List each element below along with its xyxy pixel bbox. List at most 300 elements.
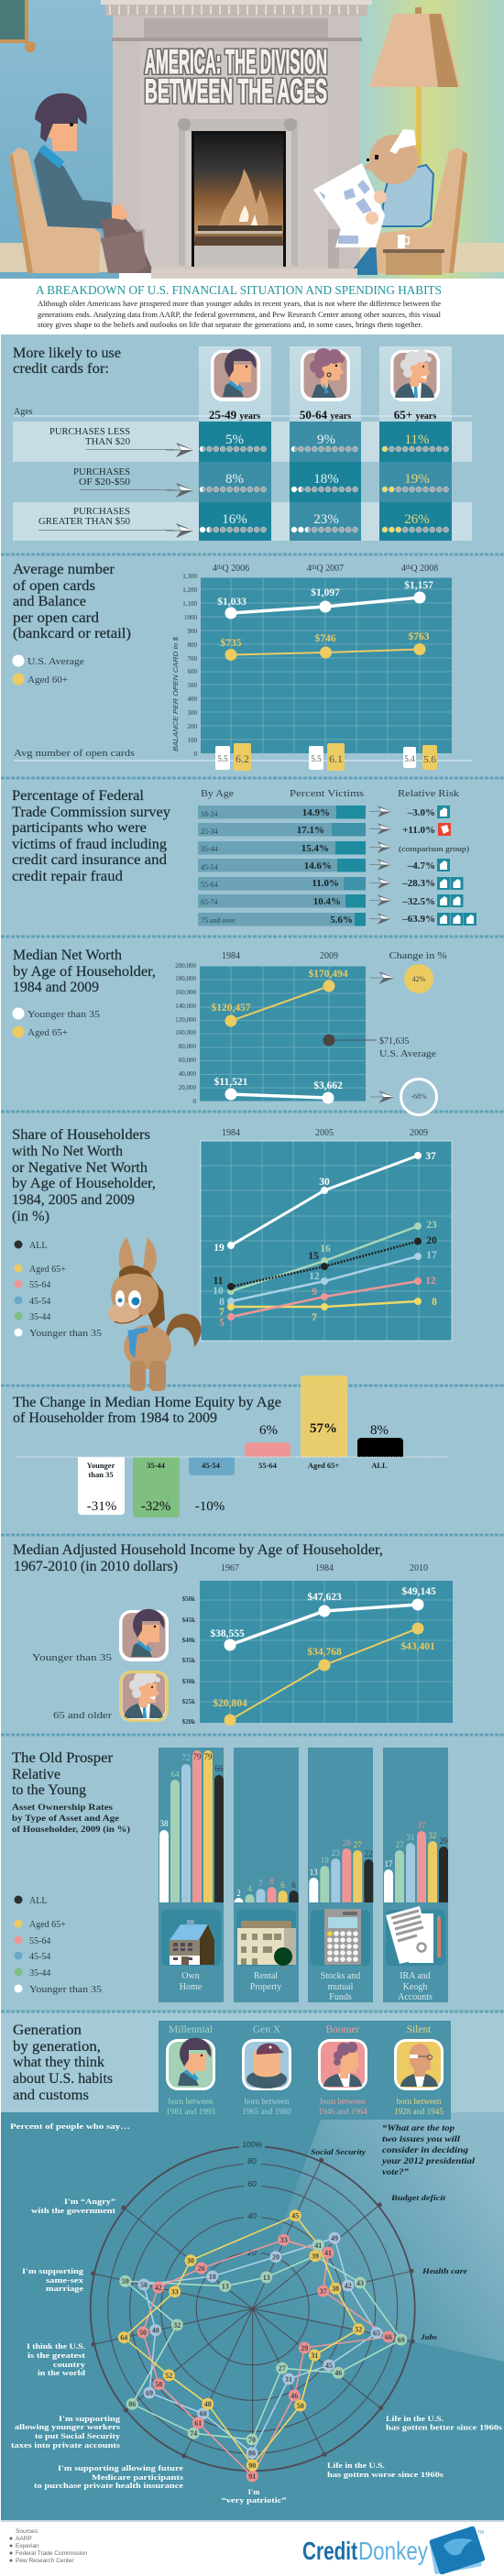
line chart: Q 2007 (316, 564, 344, 574)
node values: 37 (320, 2287, 327, 2296)
line chart: 80,000 (179, 1043, 196, 1050)
line chart: 0 (192, 1098, 196, 1105)
asset labels: Keogh (403, 1982, 427, 1992)
radar issue labels: Health care (422, 2266, 467, 2275)
bars: own home: 64 (170, 1770, 180, 1779)
avatars (211, 348, 440, 401)
heading: Percentage of Federal (12, 788, 145, 804)
line chart: 40,000 (179, 1070, 196, 1078)
line chart: 200,000 (175, 962, 196, 970)
age labels: 25-49 years (209, 408, 260, 422)
legend (13, 654, 85, 685)
birth years: 1946 and 1964 (318, 2107, 367, 2116)
heading: The Change in Median Home Equity by Age (13, 1395, 281, 1410)
fireplace surround and fire (178, 118, 298, 267)
line chart: 120,000 (175, 1016, 196, 1024)
line chart: $34,768 (307, 1646, 342, 1658)
heading: per open card (13, 610, 99, 626)
dot scales (200, 446, 449, 532)
birth years: born between (245, 2097, 290, 2106)
generation columns: Silent (407, 2024, 432, 2035)
bars: IRA and Keogh: 31 (407, 1833, 414, 1842)
bars: IRA and Keogh: 27 (396, 1840, 404, 1849)
radar issue labels: Budget deficit (390, 2193, 446, 2202)
radar chart (91, 2139, 415, 2482)
bars: rental property: 6 (280, 1880, 285, 1890)
percentages: 23% (313, 512, 339, 527)
title (145, 43, 327, 110)
node values: 50 (139, 2329, 147, 2337)
age labels: 18-24 (201, 810, 218, 818)
birth years: born between (169, 2097, 214, 2106)
open card counts: 5.4 (404, 754, 415, 763)
percentages: 19% (404, 472, 430, 487)
legend (13, 1008, 100, 1038)
age labels: 55-64 (201, 881, 218, 889)
node values: 42 (345, 2282, 352, 2290)
age labels: 50-64 years (300, 408, 351, 422)
open card counts: 5.5 (311, 754, 322, 763)
node values: 45 (291, 2212, 299, 2220)
line chart: 15 (308, 1251, 319, 1262)
node values: 49 (331, 2234, 338, 2242)
bars: rental property: 6 (291, 1880, 296, 1890)
heading: (bankcard or retail) (13, 626, 131, 641)
node values: 20 (272, 2253, 279, 2262)
heading: and customs (13, 2088, 89, 2103)
node values: 59 (122, 2277, 129, 2286)
generation columns: Gen X (253, 2024, 281, 2035)
generation columns (169, 2024, 432, 2035)
heading: 1984 and 2009 (13, 980, 99, 995)
asset labels: Accounts (398, 1992, 433, 2002)
radar statement labels: same-sex (46, 2275, 84, 2285)
panel: fraud victims: (comparison group) (399, 845, 469, 853)
line chart: $50k (182, 1595, 195, 1603)
bars: own home: 38 (159, 1819, 169, 1828)
avatars with labels: 65 and older (53, 1711, 113, 1721)
node values: 52 (355, 2326, 362, 2333)
row labels: PURCHASES (73, 466, 130, 477)
line chart: 17 (426, 1250, 437, 1261)
line chart: 180,000 (175, 975, 196, 982)
bars: stocks and funds: 27 (354, 1840, 362, 1849)
heading: (in %) (12, 1209, 49, 1224)
heading: of open cards (13, 578, 95, 594)
node values: 39 (312, 2253, 319, 2260)
line chart: $25k (182, 1698, 195, 1705)
legend: 35-44 (29, 1968, 50, 1979)
line chart: $43,401 (400, 1640, 435, 1652)
line chart: Change in % (389, 951, 447, 961)
line chart: th (217, 564, 223, 571)
line chart: 12 (425, 1276, 436, 1287)
node values: 31 (311, 2351, 318, 2360)
heading: to the Young (12, 1782, 86, 1798)
bars: rental property: 7 (258, 1879, 263, 1888)
open card counts: 6.2 (236, 752, 249, 765)
rings and spokes (91, 2146, 415, 2471)
bar labels: 35-44 (147, 1461, 166, 1470)
percentages (222, 433, 430, 527)
logo: CreditDonkey: Donkey (358, 2537, 428, 2565)
percentages: 9% (317, 433, 335, 447)
heading: about U.S. habits (13, 2071, 113, 2087)
line chart: $763 (409, 630, 430, 642)
line chart (201, 1128, 452, 1341)
age labels: 65+ years (394, 408, 436, 422)
legend (15, 1895, 102, 1995)
line chart: 700 (187, 655, 198, 663)
positive bars (245, 1376, 403, 1457)
line chart: 300 (187, 709, 198, 717)
U.S. average marker (323, 1034, 437, 1059)
young man in armchair (9, 93, 154, 273)
relative risk: –63.9% (401, 914, 435, 925)
line chart: 800 (187, 641, 198, 649)
sources (9, 2528, 87, 2564)
node values: 13 (263, 2274, 270, 2282)
scale labels: 100% (242, 2140, 262, 2149)
heading (12, 1750, 114, 1798)
radar question: “What are the top (382, 2123, 455, 2133)
avatar: boomer (318, 2039, 367, 2090)
line chart: 2009 (410, 1128, 428, 1138)
bars: stocks and funds: 22 (365, 1849, 373, 1858)
line chart: th (406, 564, 411, 571)
bar labels: 45-54 (202, 1461, 221, 1470)
radar statement labels: “very patriotic” (222, 2495, 286, 2505)
node values: 52 (165, 2372, 172, 2380)
percentages: 8% (225, 472, 244, 487)
asset labels: Funds (329, 1992, 352, 2002)
birth years: 1928 and 1945 (394, 2107, 444, 2116)
open card counts: 6.1 (329, 752, 343, 765)
node values: 46 (290, 2392, 298, 2400)
node values: 70 (248, 2436, 256, 2444)
arrows (38, 449, 174, 530)
avatar: gen x (242, 2039, 291, 2090)
legend: Younger than 35 (27, 1010, 100, 1020)
node values: 33 (171, 2287, 179, 2296)
radar statement labels (11, 2197, 503, 2505)
subheading: Asset Ownership Rates (12, 1803, 113, 1813)
panel: average open cards and balance (13, 562, 472, 771)
icon: house (170, 1920, 214, 1965)
node values: 69 (398, 2336, 405, 2344)
node values: 65 (373, 2329, 380, 2337)
percentages: 16% (222, 512, 247, 527)
line chart (171, 564, 452, 758)
node values: 58 (155, 2381, 162, 2388)
line chart: 20 (426, 1235, 437, 1246)
icon: donkey mascot (108, 1237, 202, 1391)
birth years: 1965 and 1980 (242, 2107, 291, 2116)
scale labels: 20 (247, 2248, 257, 2257)
node values: 42 (155, 2284, 162, 2292)
U.S. average marker: U.S. Average (379, 1049, 437, 1059)
line chart: $120,457 (211, 1002, 251, 1014)
legend: Aged 60+ (27, 675, 68, 685)
heading: Average number (13, 562, 115, 577)
generation columns: Millennial (169, 2024, 213, 2035)
bars: own home: 79 (192, 1752, 202, 1761)
heading: Median Adjusted Household Income by Age of Householder, (13, 1542, 383, 1558)
bar labels: Aged 65+ (308, 1461, 339, 1470)
node values: 13 (222, 2282, 229, 2291)
line chart: 16 (320, 1244, 331, 1255)
bars: rental property: 8 (269, 1877, 274, 1886)
heading: participants who were (12, 820, 147, 836)
heading: victims of fraud including (12, 837, 167, 852)
radar question: consider in deciding (382, 2146, 468, 2155)
bar values: -32% (141, 1499, 170, 1514)
legend: U.S. Average (27, 657, 85, 667)
sources: Sources: (16, 2528, 39, 2535)
heading: Generation (13, 2022, 82, 2038)
heading (12, 1127, 156, 1224)
line chart: Q 2006 (222, 564, 249, 574)
age labels: 35-44 (201, 845, 218, 853)
table header: By Age (201, 789, 235, 799)
bars: IRA and Keogh: 17 (385, 1859, 393, 1869)
line chart: $1,157 (404, 579, 433, 591)
radar statement labels: to put Social Security (35, 2431, 121, 2440)
node values: 66 (385, 2333, 392, 2341)
node values: 48 (152, 2326, 159, 2335)
age labels: 45-54 (201, 863, 218, 871)
icon: calculator (324, 1909, 361, 1965)
heading: credit cards for: (13, 361, 109, 377)
bar values (87, 1421, 389, 1514)
line chart: 200 (187, 723, 198, 730)
line chart: $1,033 (217, 596, 247, 608)
radar label: percent of people: Percent of people who say… (10, 2121, 130, 2131)
section dividers (1, 554, 504, 2011)
bars: stocks and funds (309, 1838, 373, 1902)
data cells (199, 422, 452, 541)
node values: 41 (314, 2242, 322, 2250)
legend: 55-64 (29, 1936, 50, 1946)
panel: household income (13, 1542, 453, 1726)
line chart: BALANCE PER OPEN CARD in $ (171, 636, 180, 751)
bars: IRA and Keogh: 37 (418, 1821, 426, 1830)
age labels: 25-34 (201, 828, 218, 836)
bar labels (87, 1461, 388, 1479)
bars (198, 806, 366, 926)
radar question: vote?” (382, 2168, 409, 2177)
logo: CreditDonkey (302, 2526, 486, 2575)
icon: apartment building (237, 1921, 296, 1969)
line chart: $47,623 (307, 1591, 342, 1603)
row labels: PURCHASES LESS (49, 426, 130, 437)
line chart: 140,000 (175, 1003, 196, 1010)
table header (201, 789, 459, 799)
node values: 69 (146, 2389, 153, 2397)
bars: own home: 72 (181, 1753, 191, 1762)
heading: Trade Commission survey (12, 805, 170, 820)
node values: 41 (324, 2249, 332, 2257)
change badges (370, 964, 436, 1114)
heading: credit repair fraud (12, 869, 123, 884)
row labels: GREATER THAN $50 (38, 516, 130, 527)
line chart: 20,000 (179, 1084, 196, 1091)
asset labels: Property (250, 1982, 281, 1992)
node values: 38 (332, 2285, 339, 2293)
line chart: 4 (213, 564, 217, 574)
line chart: 7 (312, 1312, 317, 1323)
heading (13, 1542, 383, 1574)
row labels: THAN $20 (85, 436, 130, 447)
panel: average open cards and balance: Avg number of open cards (14, 749, 135, 759)
intro paragraph: generations ends. Analyzing data from AARP, the federal government, and Pew Research Center among other sources, this visual (38, 310, 442, 319)
age labels (209, 408, 436, 422)
line chart: 10 (213, 1286, 224, 1297)
avatar: millennial (166, 2038, 215, 2090)
node values: 86 (248, 2449, 256, 2458)
bar labels: Younger (87, 1461, 115, 1470)
legend: 55-64 (29, 1280, 50, 1290)
radar statement labels: I'm supporting (59, 2414, 121, 2423)
logo: CreditDonkey: TM (477, 2530, 484, 2536)
radar statement labels: I think the U.S. (27, 2341, 85, 2351)
node values: 91 (248, 2472, 256, 2481)
heading (13, 345, 121, 377)
legend: Aged 65+ (29, 1920, 66, 1930)
radar issue labels: Social Security (311, 2147, 366, 2156)
node values: 33 (280, 2236, 288, 2244)
radar question (381, 2123, 475, 2177)
radar issue labels: Jobs (420, 2332, 438, 2341)
avatars with labels: Younger than 35 (32, 1653, 112, 1663)
line chart: 4 (307, 564, 312, 574)
bars: own home: 79 (203, 1752, 213, 1761)
values (297, 807, 353, 926)
line chart: $735 (220, 637, 242, 649)
panel: credit card usage: Ages (14, 407, 33, 417)
bar values: 6% (259, 1423, 278, 1438)
bars: IRA and Keogh: 32 (429, 1831, 436, 1840)
radar statement labels: I'm (248, 2487, 259, 2496)
line chart: 30 (319, 1177, 330, 1188)
panel columns (159, 1748, 448, 2002)
line chart: $20k (182, 1718, 195, 1726)
line chart: $3,662 (313, 1080, 343, 1091)
legend (15, 1241, 102, 1339)
relative risk: –4.7% (407, 860, 435, 871)
scale labels: 80 (247, 2156, 257, 2165)
green nodes (119, 2240, 407, 2445)
heading (13, 2022, 113, 2103)
line chart: 23 (426, 1220, 437, 1231)
birth years (166, 2097, 444, 2116)
intro paragraph: Although older Americans have prospered more than younger adults in recent years, that is not where the difference between the (38, 299, 441, 308)
line chart: 5 (219, 1318, 225, 1329)
bar values: 57% (310, 1421, 337, 1436)
bar labels: than 35 (88, 1470, 114, 1479)
legend: 45-54 (29, 1297, 50, 1307)
heading: by generation, (13, 2039, 101, 2055)
pink nodes (137, 2234, 394, 2482)
line chart: 1,300 (182, 573, 198, 580)
open card counts: 5.5 (217, 754, 228, 763)
bars: own home (159, 1750, 224, 1902)
legend: 35-44 (29, 1312, 50, 1322)
subheading: of Householder, 2009 (in %) (12, 1825, 130, 1835)
line chart: 160,000 (175, 989, 196, 996)
heading: what they think (13, 2055, 104, 2070)
panel: credit card usage (13, 345, 472, 541)
line chart: 600 (187, 668, 198, 675)
risk icons (437, 806, 477, 926)
heading: and Balance (13, 594, 86, 609)
heading (13, 562, 131, 641)
line chart: 11 (214, 1276, 224, 1287)
intro paragraph: story gives shape to the beliefs and outlooks on life that separate the generations and, in some cases, brings them together. (38, 320, 422, 329)
heading: 1984, 2005 and 2009 (12, 1192, 135, 1208)
percentages: 18% (313, 472, 339, 487)
sources: Pew Research Center (16, 2558, 74, 2564)
bars: stocks and funds: 13 (310, 1868, 318, 1877)
open card counts (215, 743, 437, 771)
node values: 60 (200, 2410, 207, 2417)
line chart: $1,097 (311, 586, 340, 598)
values: 14.9% (302, 807, 330, 818)
age labels: 75 and over (201, 916, 236, 925)
node values: 29 (301, 2344, 308, 2352)
heading: by Age of Householder, (13, 964, 156, 980)
relative risk (401, 807, 435, 925)
scale labels: 40 (247, 2211, 257, 2220)
lamp (369, 7, 460, 165)
bars: stocks and funds: 19 (321, 1856, 329, 1865)
relative risk: –3.0% (407, 807, 435, 818)
intro paragraph (38, 299, 442, 329)
line chart: $20,804 (213, 1697, 247, 1709)
legend: ALL (29, 1241, 47, 1251)
line chart: 37 (425, 1151, 436, 1162)
node values (120, 2212, 405, 2481)
bars: rental property (235, 1877, 299, 1902)
node values: 43 (356, 2279, 364, 2287)
open card counts: 5.6 (423, 754, 436, 765)
line chart: $746 (315, 632, 336, 644)
bars: IRA and Keogh (384, 1821, 448, 1902)
line chart: 1,100 (182, 600, 198, 608)
change badges: 42% (412, 975, 426, 983)
asset labels: Own (181, 1971, 200, 1981)
age labels (201, 810, 236, 925)
U.S. average marker: $71,635 (379, 1036, 409, 1047)
node values: 45 (325, 2362, 333, 2370)
icon: documents and pencil (386, 1906, 441, 1964)
bar values: -10% (195, 1499, 225, 1514)
line chart: $11,521 (214, 1076, 248, 1088)
legend: Aged 65+ (29, 1265, 66, 1275)
legend: Younger than 35 (29, 1329, 102, 1339)
node values: 50 (297, 2402, 304, 2410)
heading: with No Net Worth (12, 1144, 123, 1159)
line chart: 0 (194, 751, 198, 758)
legend: 45-54 (29, 1952, 50, 1962)
line chart: $49,145 (401, 1585, 436, 1597)
bars: stocks and funds: 23 (332, 1848, 340, 1858)
line chart: 60,000 (179, 1057, 196, 1064)
radar statement labels: in the world (38, 2368, 85, 2377)
panel: generations (1, 2021, 504, 2520)
bar values: -31% (87, 1499, 116, 1514)
radar statement labels: I'm supporting allowing future (58, 2463, 183, 2472)
